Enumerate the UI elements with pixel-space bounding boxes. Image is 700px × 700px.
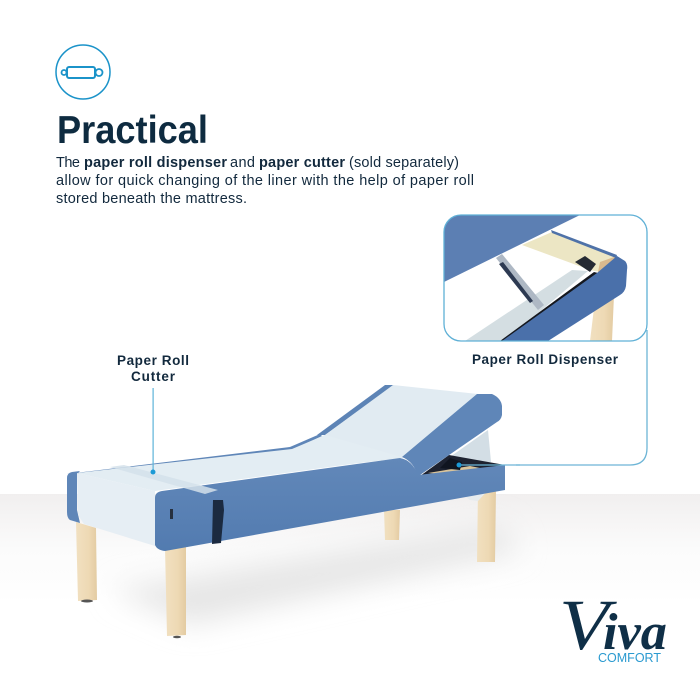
mattress paper — [77, 435, 402, 491]
opening — [420, 455, 505, 476]
dark edge — [500, 272, 598, 341]
end blue strip — [67, 471, 80, 523]
body text: allow for quick changing of the liner with the help of paper roll — [56, 173, 474, 189]
legs — [76, 488, 496, 638]
rail back edge — [551, 230, 617, 258]
front panel — [155, 458, 505, 551]
floor background — [0, 494, 700, 604]
pointer: cutter — [150, 388, 156, 474]
body text: and — [230, 155, 255, 171]
paper under backrest — [450, 430, 491, 468]
logo — [559, 585, 667, 665]
table — [67, 385, 505, 638]
raised backrest — [444, 215, 580, 282]
strap — [212, 500, 224, 544]
logo: V — [559, 585, 617, 665]
label: paper roll cutter: Cutter — [131, 369, 176, 384]
callout frame line to dispenser — [516, 330, 647, 465]
mattress back stripe — [67, 434, 322, 474]
logo: iva — [603, 604, 667, 661]
front rail — [502, 256, 627, 341]
logo: COMFORT — [598, 651, 661, 665]
body text: stored beneath the mattress. — [56, 191, 247, 207]
beige board — [522, 232, 617, 272]
body text: The — [56, 155, 80, 171]
label: paper roll cutter: Paper Roll — [117, 353, 189, 368]
panel: dispenser inset — [444, 215, 647, 341]
backrest paper — [280, 385, 478, 470]
small clip — [170, 509, 173, 519]
icon: paper roll — [56, 45, 110, 99]
title: Practical — [57, 109, 208, 152]
slide bar — [496, 254, 544, 310]
pointer: dispenser — [456, 462, 520, 468]
label: paper roll dispenser: Paper Roll Dispenser — [472, 352, 619, 367]
body text: (sold separately) — [349, 155, 459, 171]
backrest stripe — [317, 385, 394, 435]
body text — [56, 155, 474, 207]
paper roll — [465, 270, 588, 341]
label: paper roll cutter — [117, 353, 189, 384]
body text: paper roll dispenser — [84, 155, 227, 171]
end paper — [77, 473, 155, 546]
floor shadow — [110, 525, 520, 625]
body text: paper cutter — [259, 155, 345, 171]
backrest wedge — [402, 394, 502, 475]
leg — [590, 295, 614, 341]
cutter band — [110, 465, 218, 494]
